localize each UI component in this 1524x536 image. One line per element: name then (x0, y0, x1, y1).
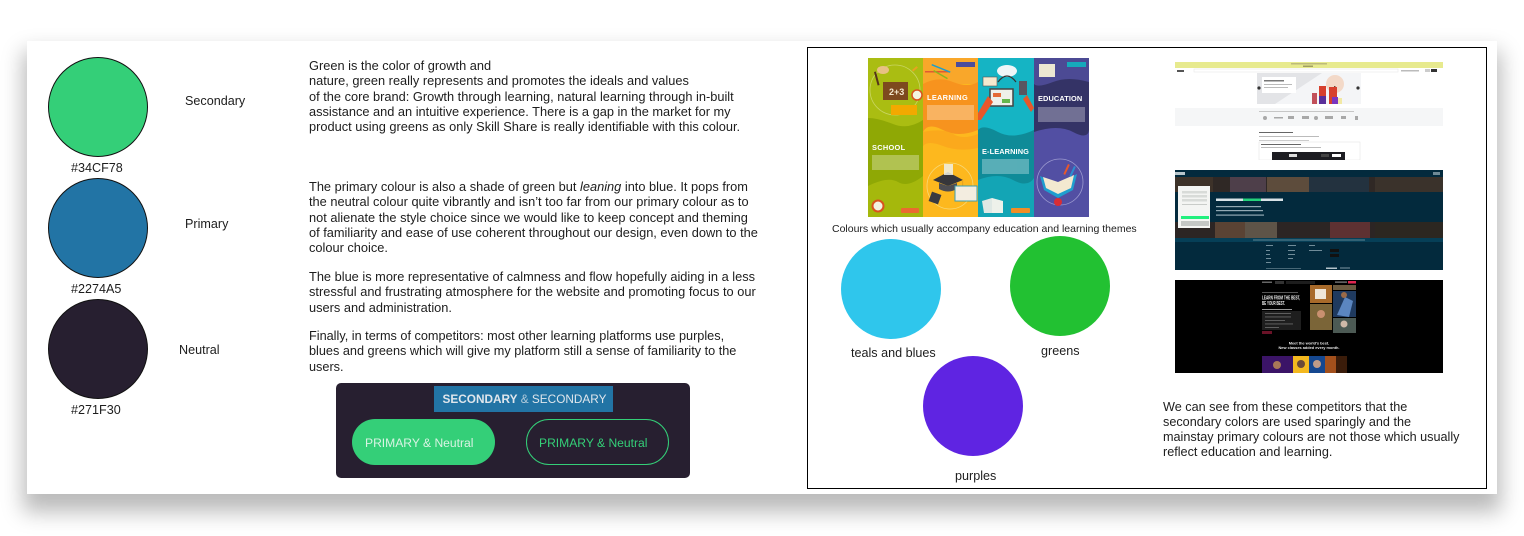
text: primary rationale (309, 179, 758, 255)
hero headline (1262, 296, 1300, 307)
secondary label: Secondary (185, 94, 245, 108)
image: education poster (868, 58, 1089, 217)
text: competitors rationale: Finally, in terms of competitors: most other learning platforms use purples, (309, 329, 724, 343)
section headline: New classes added every month. (1279, 345, 1339, 350)
screenshot: competitor one (1175, 62, 1443, 160)
blackboard sum: 2+3 (889, 87, 904, 97)
poster art (870, 62, 1086, 213)
text: competitor conclusion: We can see from these competitors that the (1163, 400, 1407, 414)
secondary circle (48, 57, 148, 157)
swatch: teals and blues (841, 239, 941, 360)
text: competitors rationale (309, 329, 736, 374)
text: blue rationale: users and administration. (309, 300, 452, 315)
outlined button (526, 419, 669, 465)
text: primary rationale: not alienate the style choice since we would like to keep concept and theming (309, 210, 748, 225)
text: green rationale: assistance and an intuitive experience. There is a gap in the market for my (309, 104, 731, 119)
text: blue rationale: stressful and frustrating atmosphere for the website and promoting focus to our (309, 284, 756, 299)
screenshot: competitor two (1175, 170, 1443, 270)
panel: research (807, 47, 1487, 489)
text: primary rationale: The primary colour is also a shade of green but leaning into blue. It pops from (309, 179, 748, 194)
poster headings: SCHOOL (872, 143, 906, 152)
text: green rationale: of the core brand: Growth through learning, natural learning through in-built (309, 89, 734, 104)
teal circle (841, 239, 941, 339)
swatch: greens (1010, 236, 1110, 358)
section headline (1279, 340, 1339, 350)
section headline: Meet the world's best. (1289, 340, 1329, 346)
text: green rationale: nature, green really represents and promotes the ideals and values (309, 73, 689, 88)
filled button (352, 419, 495, 465)
neutral circle (48, 299, 148, 399)
screenshot: competitor three (1175, 280, 1443, 373)
text: green rationale: product using greens as only Skill Share is really identifiable with this colour. (309, 119, 740, 134)
text: competitors rationale: users. (309, 360, 344, 374)
text: primary rationale: the neutral colour quite vibrantly and isn’t too far from our primary colour as to (309, 194, 749, 209)
text: green rationale (309, 58, 740, 134)
primary circle (48, 178, 148, 278)
poster headings: EDUCATION (1038, 94, 1082, 103)
purple label: purples (955, 469, 996, 483)
text: competitor conclusion: reflect education and learning. (1163, 445, 1332, 459)
caption: education colours: Colours which usually accompany education and learning themes (832, 223, 1137, 235)
hero headline: BE YOUR BEST. (1262, 301, 1285, 307)
text: competitor conclusion: mainstay primary colours are not those which usually (1163, 430, 1459, 444)
neutral label: Neutral (179, 343, 220, 357)
swatch: primary (48, 178, 228, 296)
poster headings: E-LEARNING (982, 147, 1029, 156)
filled button: PRIMARY & Neutral (365, 436, 473, 450)
text: primary rationale: colour choice. (309, 240, 388, 255)
primary hex: #2274A5 (71, 282, 121, 296)
secondary hex: #34CF78 (71, 161, 123, 175)
neutral hex: #271F30 (71, 403, 121, 417)
swatch: secondary (48, 57, 246, 175)
outlined button: PRIMARY & Neutral (539, 436, 647, 450)
primary label: Primary (185, 217, 228, 231)
text: blue rationale (309, 269, 756, 315)
swatch: neutral (48, 299, 220, 417)
text: competitor conclusion: secondary colors are used sparingly and the (1163, 415, 1411, 429)
green circle (1010, 236, 1110, 336)
teal label: teals and blues (851, 346, 936, 360)
poster headings: LEARNING (927, 93, 968, 102)
swatch: purples (923, 356, 1023, 483)
purple circle (923, 356, 1023, 456)
text: green rationale: Green is the color of growth and (309, 58, 491, 73)
header chip: SECONDARY & SECONDARY (443, 392, 606, 406)
text: competitors rationale: blues and greens which will give my platform still a sense of familiarity to the (309, 344, 736, 358)
text: blue rationale: The blue is more representative of calmness and flow hopefully aiding in a less (309, 269, 755, 284)
poster body lines (872, 105, 1085, 174)
hero headline: LEARN FROM THE BEST, (1262, 296, 1300, 302)
green label: greens (1041, 344, 1080, 358)
text: competitor conclusion (1163, 400, 1460, 459)
poster headings (872, 93, 1082, 156)
header chip (434, 386, 613, 412)
panel: button sample (336, 383, 690, 478)
text: primary rationale: of familiarity and ease of use coherent throughout our design, even down to the (309, 225, 758, 240)
